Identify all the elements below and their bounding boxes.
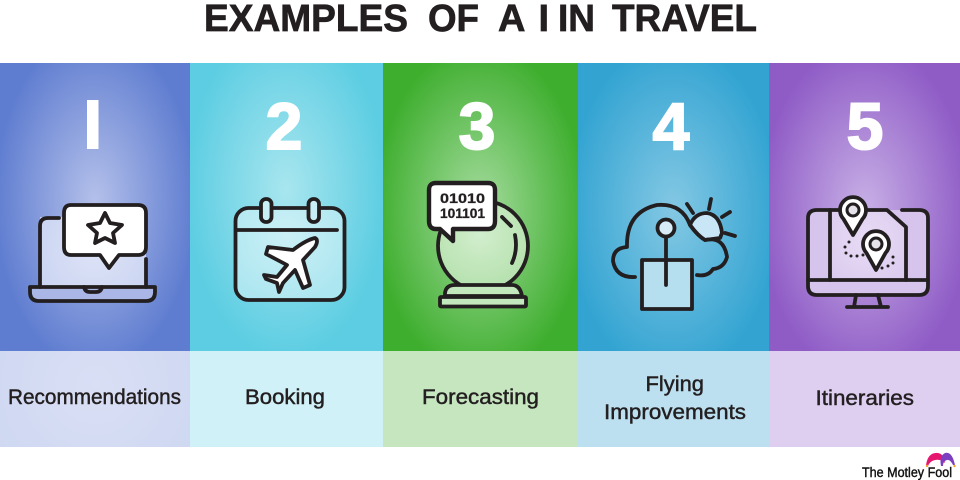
label: Recommendations: Recommendations bbox=[8, 386, 181, 409]
number 1: 1 bbox=[74, 89, 110, 163]
title bbox=[204, 0, 757, 40]
icon: laptop with star speech bubble bbox=[30, 205, 155, 301]
label band: forecasting bbox=[383, 351, 578, 447]
number 4: 4 bbox=[653, 89, 690, 163]
number 5: 5 bbox=[847, 89, 883, 163]
panel: forecasting bbox=[383, 63, 578, 447]
number 3: 3 bbox=[459, 89, 495, 163]
label band: itineraries bbox=[769, 351, 960, 447]
icon: jester hat bbox=[926, 453, 956, 467]
icon: monitor with map pins bbox=[808, 197, 928, 307]
label: Flying Improvements: Flying bbox=[646, 373, 704, 396]
icon: crystal ball with binary bubble bbox=[429, 183, 528, 306]
binary text bbox=[440, 190, 485, 221]
wordmark: The Motley Fool bbox=[862, 465, 952, 480]
dotted route bbox=[844, 240, 894, 270]
label: Flying Improvements bbox=[604, 373, 746, 424]
panel: recommendations bbox=[0, 63, 190, 447]
label band: booking bbox=[190, 351, 383, 447]
icon: cloud, sun and joystick box bbox=[613, 199, 735, 309]
label: Itineraries: Itineraries bbox=[816, 387, 914, 410]
icon: calendar with plane bbox=[236, 199, 344, 300]
label band: recommendations bbox=[0, 351, 190, 447]
label: Booking: Booking bbox=[245, 386, 325, 409]
binary text: 01010 bbox=[440, 190, 485, 206]
number 2: 2 bbox=[266, 89, 302, 163]
panel: flying improvements bbox=[578, 63, 769, 447]
label band: flying improvements bbox=[578, 351, 769, 447]
number 1 bbox=[87, 100, 98, 149]
label: Flying Improvements: Improvements bbox=[604, 401, 746, 424]
panel: booking bbox=[190, 63, 383, 447]
binary text: 101101 bbox=[440, 205, 485, 221]
logo: The Motley Fool bbox=[862, 453, 956, 480]
label: Forecasting: Forecasting bbox=[422, 386, 539, 409]
panel: itineraries bbox=[769, 63, 960, 447]
